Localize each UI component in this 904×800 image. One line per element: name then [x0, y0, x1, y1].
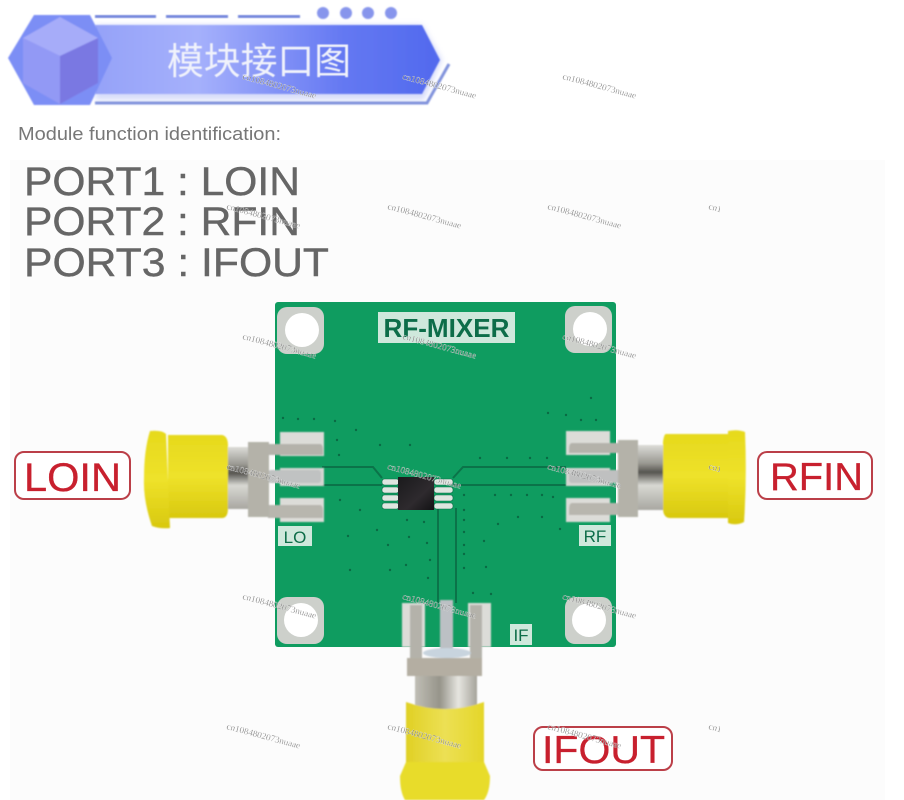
- vias: [282, 397, 597, 595]
- watermarks: cn1084802073nuaae: [561, 71, 638, 101]
- port 1: PORT1 : LOIN: [24, 160, 300, 204]
- banner glow: [95, 25, 442, 100]
- watermarks: cn1084802073nuaae: [241, 331, 318, 361]
- yellow cap: [663, 434, 728, 518]
- banner bottom rail: [95, 64, 449, 103]
- hexagon icon with cube: [8, 15, 112, 105]
- watermarks: cn1084802073nuaae: [225, 461, 302, 491]
- watermarks: cn1084802073nuaae: [707, 201, 784, 231]
- watermarks: cn1084802073nuaae: [546, 721, 623, 751]
- flange: [407, 658, 482, 676]
- banner top dashes: [95, 15, 300, 18]
- watermarks: cn1084802073nuaae: [386, 721, 463, 751]
- pins: [569, 443, 620, 453]
- pads: [566, 431, 610, 455]
- RF-MIXER silkscreen label: RF-MIXER: [384, 313, 510, 343]
- banner title: 模块接口图: [167, 41, 351, 82]
- yellow cap: [406, 702, 484, 766]
- yellow cap: [168, 435, 228, 518]
- port list: [24, 160, 329, 285]
- watermarks: cn1084802073nuaae: [707, 721, 784, 751]
- insulator: [423, 648, 471, 658]
- watermarks: cn1084802073nuaae: [386, 201, 463, 231]
- watermarks: cn1084802073nuaae: [401, 71, 478, 101]
- PCB traces: [322, 467, 566, 603]
- pins: [410, 605, 422, 660]
- port 3: PORT3 : IFOUT: [24, 241, 329, 285]
- subtitle: Module function identification:: [18, 123, 281, 144]
- RFIN callout: RFIN: [770, 456, 863, 499]
- IC chip: [382, 477, 453, 510]
- flange: [618, 440, 638, 517]
- watermarks: cn1084802073nuaae: [225, 201, 302, 231]
- IF silkscreen label: IF: [513, 626, 529, 645]
- barrel: [415, 676, 477, 714]
- watermarks: cn1084802073nuaae: [386, 461, 463, 491]
- watermarks: cn1084802073nuaae: [241, 591, 318, 621]
- IFOUT callout: IFOUT: [542, 729, 665, 772]
- LO silkscreen label: LO: [284, 528, 306, 547]
- IF silkscreen label: [510, 624, 532, 645]
- watermarks: cn1084802073nuaae: [241, 71, 318, 101]
- LOIN callout: LOIN: [24, 456, 121, 500]
- RF silkscreen label: RF: [584, 527, 606, 546]
- right SMA connector: [566, 430, 746, 524]
- watermarks: cn1084802073nuaae: [546, 201, 623, 231]
- mounting holes: [277, 306, 612, 644]
- barrel: [636, 445, 666, 510]
- banner body: [95, 25, 440, 94]
- watermarks: [226, 75, 720, 748]
- bottom SMA connector: [400, 600, 491, 800]
- RF silkscreen label: [579, 525, 611, 546]
- pads: [402, 603, 425, 647]
- board body: [275, 302, 616, 647]
- port 2: PORT2 : RFIN: [24, 200, 300, 244]
- watermarks: cn1084802073nuaae: [401, 591, 478, 621]
- watermarks: cn1084802073nuaae: [707, 461, 784, 491]
- pads: [280, 432, 324, 456]
- barrel: [222, 447, 252, 509]
- title banner: [8, 7, 449, 105]
- watermarks: cn1084802073nuaae: [401, 331, 478, 361]
- watermarks: cn1084802073nuaae: [561, 591, 638, 621]
- watermarks: cn1084802073nuaae: [561, 331, 638, 361]
- watermarks: cn1084802073nuaae: [225, 721, 302, 751]
- left SMA connector: [144, 431, 324, 528]
- photo background: [10, 160, 885, 800]
- PCB board: [275, 302, 616, 647]
- watermarks: cn1084802073nuaae: [546, 461, 623, 491]
- banner dots: [317, 7, 397, 19]
- LO silkscreen label: [278, 526, 312, 547]
- pins: [268, 444, 323, 455]
- flange: [248, 442, 269, 517]
